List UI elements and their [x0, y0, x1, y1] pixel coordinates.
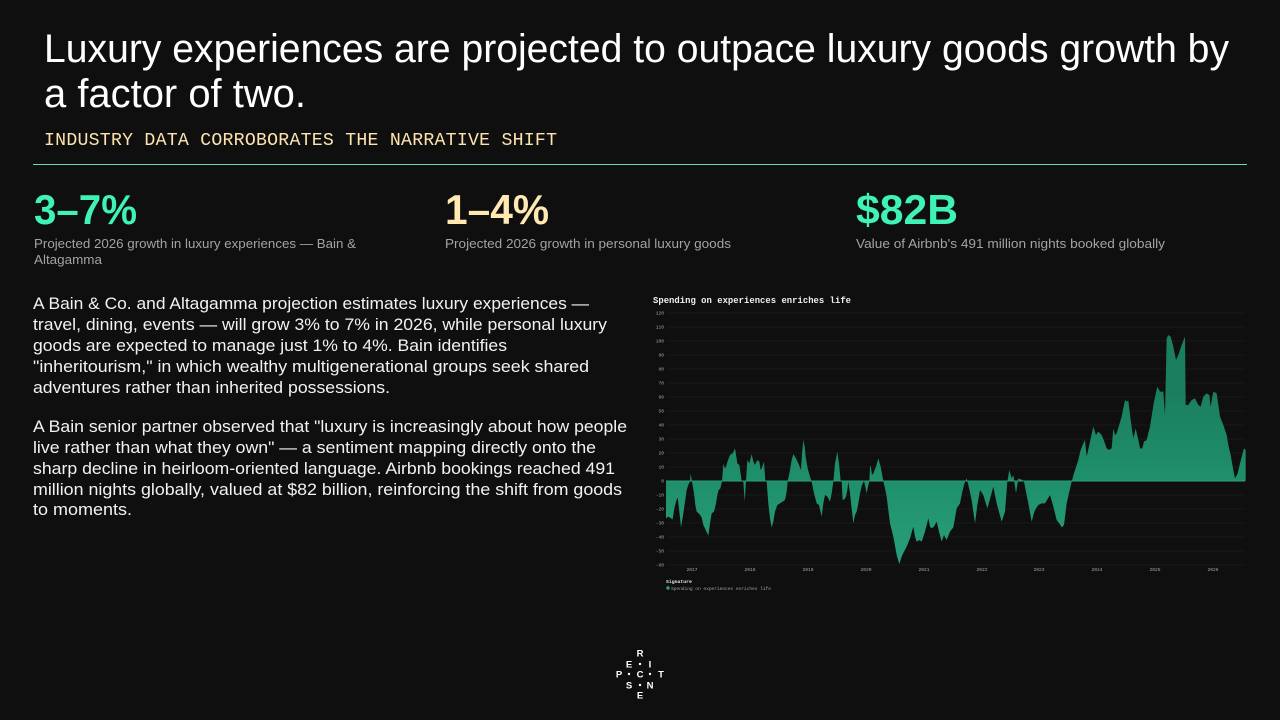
y axis labels: 90 — [658, 352, 664, 358]
logo: RECIPE SENT monogram: E — [637, 690, 643, 702]
body paragraph one: A Bain & Co. and Altagamma projection estimates luxury experiences — — [33, 295, 590, 313]
x axis labels: 2018 — [744, 567, 756, 573]
title: a factor of two. — [44, 72, 306, 116]
x axis labels — [686, 567, 1219, 573]
y axis labels: -10 — [656, 492, 664, 498]
stat: personal luxury goods: Projected 2026 growth in personal luxury goods — [445, 237, 731, 251]
y axis labels: -20 — [656, 506, 664, 512]
logo: RECIPE SENT monogram — [616, 648, 664, 702]
logo: RECIPE SENT monogram: E — [626, 660, 632, 670]
area chart: spending on experiences — [653, 296, 1246, 592]
stat: personal luxury goods: 1–4% — [445, 186, 549, 233]
body paragraph two: live rather than what they own" — a sentiment mapping directly onto the — [33, 439, 596, 457]
y axis labels: 10 — [658, 464, 664, 470]
body paragraph one — [33, 295, 608, 397]
logo: RECIPE SENT monogram: P — [616, 670, 623, 680]
title — [44, 27, 1229, 116]
area series — [666, 335, 1246, 564]
y axis labels: 80 — [658, 366, 664, 372]
body paragraph two: sharp decline in heirloom-oriented language. Airbnb bookings reached 491 — [33, 460, 615, 478]
logo: RECIPE SENT monogram: S — [626, 680, 632, 692]
y axis labels: 120 — [656, 310, 664, 316]
body paragraph two: A Bain senior partner observed that "luxury is increasingly about how people — [33, 418, 627, 436]
body paragraph one: goods are expected to manage just 1% to 4%. Bain identifies — [33, 337, 507, 355]
stat caption: luxury experiences: Projected 2026 growth in luxury experiences — Bain & — [34, 237, 357, 251]
x axis labels: 2023 — [1033, 567, 1045, 573]
x axis labels: 2021 — [918, 567, 930, 573]
chart legend: Signature — [666, 579, 692, 585]
x axis labels: 2022 — [976, 567, 988, 573]
y axis labels: 0 — [661, 478, 664, 484]
stat caption: luxury experiences: Altagamma — [34, 253, 102, 267]
y axis labels: -30 — [656, 520, 664, 526]
y axis labels: 40 — [658, 422, 664, 428]
body paragraph two: million nights globally, valued at $82 billion, reinforcing the shift from goods — [33, 481, 622, 499]
stat caption: luxury experiences — [34, 237, 357, 267]
x axis labels: 2024 — [1091, 567, 1103, 573]
stat: luxury experiences — [34, 186, 357, 267]
chart legend: Spending on experiences enriches life — [671, 586, 771, 592]
title: Luxury experiences are projected to outpace luxury goods growth by — [44, 27, 1229, 71]
y axis labels: 70 — [658, 380, 664, 386]
logo: RECIPE SENT monogram: I — [649, 660, 651, 670]
chart title: Spending on experiences enriches life — [653, 296, 851, 306]
body paragraph two: to moments. — [33, 501, 132, 519]
logo: RECIPE SENT monogram: R — [637, 648, 644, 660]
y axis labels — [656, 310, 664, 568]
x axis labels: 2020 — [860, 567, 872, 573]
y axis labels: 30 — [658, 436, 664, 442]
logo: RECIPE SENT monogram: N — [647, 680, 654, 692]
stat: luxury experiences: 3–7% — [34, 186, 137, 233]
stat: Airbnb value: Value of Airbnb's 491 million nights booked globally — [856, 237, 1166, 251]
stat: Airbnb value — [856, 186, 1166, 251]
body paragraph one: travel, dining, events — will grow 3% to 7% in 2026, while personal luxury — [33, 316, 608, 334]
body paragraph one: adventures rather than inherited possessions. — [33, 379, 390, 397]
logo: RECIPE SENT monogram: C — [637, 670, 644, 680]
y axis labels: 50 — [658, 408, 664, 414]
stat: Airbnb value: $82B — [856, 186, 958, 233]
body paragraph two — [33, 418, 627, 519]
y axis labels: 110 — [656, 324, 664, 330]
subtitle: INDUSTRY DATA CORROBORATES THE NARRATIVE SHIFT — [44, 131, 557, 151]
y axis labels: 20 — [658, 450, 664, 456]
stat: personal luxury goods — [445, 186, 731, 251]
y axis labels: -40 — [656, 534, 664, 540]
y axis labels: -50 — [656, 548, 664, 554]
body paragraph one: "inheritourism," in which wealthy multigenerational groups seek shared — [33, 358, 589, 376]
x axis labels: 2026 — [1207, 567, 1219, 573]
y axis labels: 60 — [658, 394, 664, 400]
chart legend — [666, 579, 771, 592]
logo: RECIPE SENT monogram: T — [658, 670, 664, 680]
x axis labels: 2019 — [802, 567, 814, 573]
y axis labels: -60 — [656, 562, 664, 568]
y axis labels: 100 — [656, 338, 664, 344]
x axis labels: 2025 — [1149, 567, 1161, 573]
x axis labels: 2017 — [686, 567, 698, 573]
